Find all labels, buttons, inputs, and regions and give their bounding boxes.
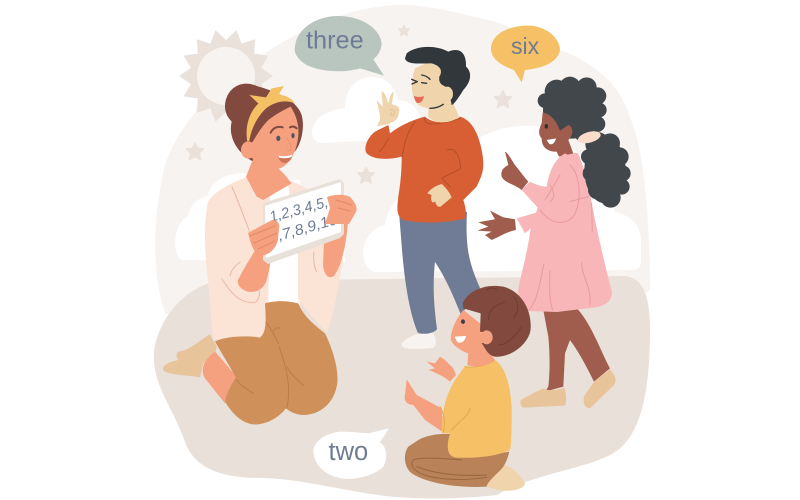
- card text line one: 1,2,3,4,5,: [268, 194, 330, 226]
- teacher left hand: [248, 220, 279, 255]
- dress creases: [540, 165, 592, 232]
- girl raised hand: [501, 152, 528, 190]
- teacher hair: [225, 84, 303, 162]
- icon: star right: [494, 91, 512, 108]
- teacher foot: [203, 352, 237, 403]
- background blob: [155, 5, 650, 330]
- seated boy head: [451, 310, 495, 366]
- boy shoe: [402, 332, 436, 349]
- skirt creases: [529, 263, 590, 310]
- raised hand: [377, 92, 399, 127]
- girl hair: [538, 77, 607, 142]
- boy sweater and head: [365, 47, 483, 223]
- lower hand: [427, 184, 452, 207]
- teacher trousers: [215, 301, 338, 424]
- hair tie: [577, 129, 602, 145]
- teacher jacket: [205, 177, 343, 340]
- sweater: [365, 117, 483, 223]
- standing boy: [365, 47, 483, 349]
- seated boy trousers: [405, 434, 509, 487]
- face: [412, 60, 455, 109]
- hand detail: [390, 110, 394, 116]
- seated boy upper hand: [427, 357, 456, 382]
- icon: star middle: [358, 167, 374, 183]
- speech bubble: six: [491, 26, 560, 82]
- speech bubble: two: [313, 428, 389, 479]
- speech bubble: three: [295, 16, 384, 76]
- girl sleeves: [517, 210, 560, 233]
- trouser creases: [412, 458, 487, 479]
- girl legs: [543, 307, 610, 392]
- label: two: two: [328, 438, 368, 466]
- girl dress: [518, 153, 612, 312]
- seated boy smile: [455, 336, 466, 343]
- ear: [442, 87, 453, 101]
- teacher left forearm: [238, 240, 271, 292]
- seated boy ear: [481, 330, 493, 344]
- hair: [405, 47, 470, 105]
- seated boy arm: [405, 379, 443, 433]
- girl ponytail: [581, 132, 631, 208]
- shirt creases: [440, 361, 494, 433]
- face details: [412, 75, 443, 108]
- sweater creases: [379, 118, 461, 187]
- girl face details: [545, 124, 548, 129]
- girl lower hand: [477, 211, 516, 240]
- seated boy: [405, 286, 531, 491]
- hair lines: [487, 288, 522, 345]
- teacher face: [251, 107, 298, 169]
- card text line two: 6,7,8,9,10: [267, 211, 340, 247]
- teacher neck: [246, 158, 292, 200]
- label: three: three: [306, 26, 364, 54]
- jacket creases: [222, 187, 317, 302]
- seated boy hair: [463, 286, 531, 357]
- teacher facial features: [271, 127, 297, 163]
- teacher trouser creases: [236, 323, 304, 408]
- teacher right hand: [325, 195, 357, 224]
- seated boy shoe: [487, 465, 525, 491]
- floor: [154, 276, 650, 498]
- girl face: [539, 113, 573, 157]
- label: six: six: [511, 33, 540, 59]
- teacher ear: [241, 141, 256, 159]
- clouds: [175, 77, 641, 272]
- teacher right forearm: [323, 222, 348, 277]
- teacher headband: [247, 86, 295, 142]
- teacher white shirt: [266, 180, 300, 305]
- seated boy shirt: [442, 360, 512, 458]
- icon: star left: [186, 143, 204, 160]
- mouth: [414, 96, 424, 103]
- icon: sun: [179, 30, 273, 122]
- number card: [263, 179, 344, 264]
- girl: [477, 77, 631, 408]
- teacher: [163, 84, 357, 424]
- icon: star top: [398, 25, 410, 36]
- seated boy eye: [461, 319, 465, 324]
- boy pants: [399, 212, 480, 334]
- girl shoes: [520, 369, 616, 408]
- teacher shoe: [163, 334, 217, 377]
- neck: [428, 103, 459, 122]
